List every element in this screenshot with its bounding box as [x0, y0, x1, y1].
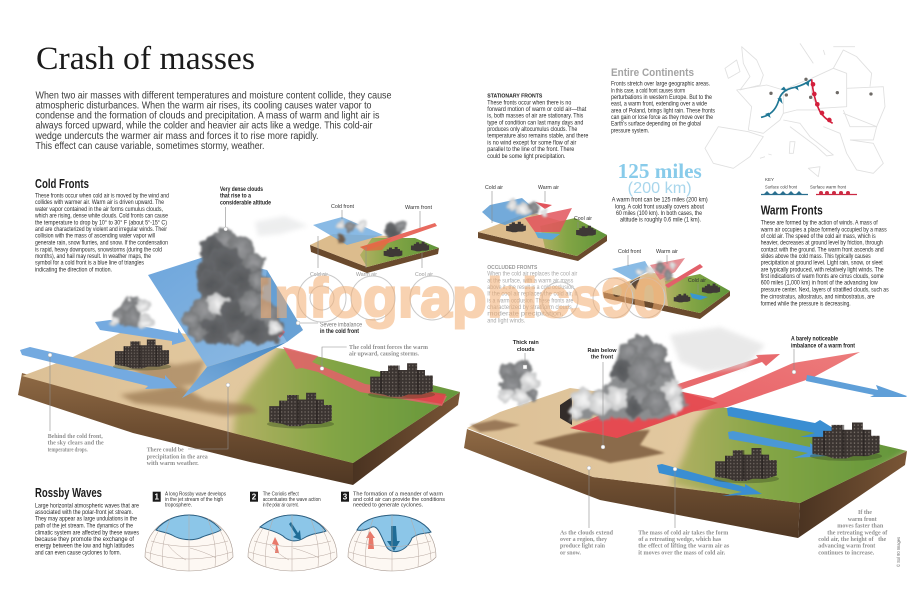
mini diagram: occluded front: Cold air [688, 278, 706, 284]
label: very dense clouds: considerable altitude [220, 200, 272, 206]
globe 3 [348, 515, 436, 571]
panel: occluded fronts [487, 265, 578, 325]
intro text: This effect can cause variable, sometimes stormy, weather. [36, 140, 264, 152]
panel: warm fronts text: These are formed by the action of winds. A mass of [761, 221, 878, 227]
label: mass of cold air: it moves over the mass of cold air. [638, 550, 726, 556]
label: mass of cold air [638, 467, 730, 556]
label: warm air upward: The cold front forces the warm [349, 345, 428, 351]
label: precipitation: with warm weather. [147, 461, 199, 467]
label: warm front faster: continues to increase. [818, 550, 875, 556]
panel: cold fronts text: collision with the mass of ascending water vapor will [35, 234, 155, 240]
watermark: Infographics90 [258, 266, 665, 329]
panel: stationary fronts: temperature also remains stable, and there [487, 134, 589, 140]
map key: Surface cold front [765, 184, 798, 190]
panel: occluded fronts: OCCLUDED FRONTS [487, 265, 538, 271]
panel: cold fronts text: These fronts occur when cold air is moved by the wind and [35, 193, 169, 199]
label: precipitation [147, 383, 230, 467]
label: warm air upward [320, 345, 428, 370]
label: warm front faster: warm front [848, 517, 877, 523]
panel: entire continents [611, 67, 715, 135]
label: barely noticeable imbalance [791, 337, 855, 374]
mini diagram: stationary front: Cold air [485, 185, 503, 191]
label: clouds extend [560, 466, 614, 556]
label: severe imbalance: in the cold front [320, 329, 359, 335]
intro text: condense and the formation of clouds and precipitation. A mass of warm and light air is [36, 110, 380, 122]
panel: rossby waves text: Rossby Waves [35, 486, 102, 500]
label: thick rain clouds [513, 340, 539, 369]
label: mass of cold air: of a retreating wedge, which has [638, 537, 722, 543]
label: very dense clouds [220, 187, 272, 231]
mini diagram: cold and warm front: Warm air [356, 272, 377, 278]
step 1 [153, 492, 226, 508]
step 3: 3 [343, 492, 348, 502]
blue warm air arrows [657, 375, 907, 496]
warm air wedge [570, 352, 860, 438]
panel: warm fronts text: slides above the cold mass. This typically causes [761, 254, 871, 260]
intro text [35, 90, 392, 152]
mini diagram: occluded front: Warm air [656, 249, 678, 255]
label: warm front faster: the retreating wedge of [827, 530, 888, 536]
city [113, 340, 171, 370]
step 3: The formation of a meander of warm [353, 492, 443, 498]
label: warm front faster: advancing warm front [818, 544, 875, 550]
label: rain below the front: Rain below [587, 348, 617, 354]
callout: 125 miles: 60 miles (100 km). In both cases, the [616, 211, 703, 217]
dense cloud [182, 216, 308, 346]
step 3 [341, 492, 446, 508]
panel: stationary fronts: These fronts occur when there is no [487, 100, 572, 106]
panel: cold fronts text: and are characterized by violent and irregular winds. Their [35, 227, 167, 233]
label: warm air upward: air upward, causing storms. [349, 352, 419, 358]
warm air arrows [283, 347, 447, 406]
small cloud [110, 296, 153, 329]
panel: entire continents: pressure system. [611, 129, 649, 135]
panel: warm fronts text [760, 204, 889, 307]
step 1: A long Rossby wave develops [165, 492, 226, 498]
panel: warm fronts text: precipitation at ground level. Light rain, snow, or sleet [761, 261, 883, 267]
panel: stationary fronts: forward motion of warm or cold air—that [487, 107, 587, 113]
panel: warm fronts text: contact with the ground. The warm front ascends and [761, 247, 884, 253]
step 1: in the jet stream of the high [165, 497, 223, 503]
intro text: atmospheric disturbances. When the warm air rises, its cooling causes water vapor to [36, 100, 372, 112]
map key [761, 177, 857, 195]
panel: entire continents: Fronts stretch over large geographic areas. [611, 82, 710, 88]
panel: rossby waves text: climatic system are affected by these waves [35, 530, 139, 536]
panel: stationary fronts: produces only altocumulus clouds. The [487, 127, 578, 133]
panel: cold fronts text: water vapor contained in the air forms cumulus clouds, [34, 207, 163, 213]
label: clouds extend: produce light rain [560, 544, 606, 550]
cities [560, 397, 882, 483]
label: behind the cold front: temperature drops. [48, 447, 88, 453]
title: Crash of masses [36, 41, 255, 77]
panel: warm fronts text: first indications of warm fronts are cirrus clouds, some [761, 274, 884, 280]
panel: stationary fronts: type of condition can last many days and [487, 120, 583, 126]
callout: 125 miles: (200 km) [628, 180, 692, 197]
callout: 125 miles: altitude is roughly 0.6 mile (1 km). [620, 218, 701, 224]
label: mass of cold air: The mass of cold air takes the form [638, 530, 728, 536]
panel: stationary fronts: is no wind except for some flow of air [487, 140, 576, 146]
label: rain below the front: the front [591, 355, 613, 361]
step 2: The Coriolis effect [263, 492, 299, 498]
label: behind the cold front [48, 353, 104, 453]
label: behind the cold front: the sky clears and the [48, 441, 104, 447]
label: precipitation: There could be [147, 447, 184, 453]
step 2: 2 [252, 492, 257, 502]
label: very dense clouds: that rise to a [220, 194, 252, 200]
label: warm front faster: moves faster than [837, 524, 884, 530]
callout: 125 miles: long. A cold front usually covers about [615, 204, 704, 210]
label: mass of cold air: the effect of lifting the warm air as [638, 544, 730, 550]
panel: stationary fronts [487, 93, 589, 160]
panel: cold fronts text: symbol for a cold front is a blue line of triangles [35, 261, 144, 267]
diagram: warm front block [464, 327, 920, 538]
mini diagram: occluded front [603, 249, 730, 319]
blue cold air arrows [20, 320, 186, 389]
globe 1 [145, 515, 233, 571]
panel: stationary fronts: STATIONARY FRONTS [487, 93, 543, 99]
label: rain below the front [587, 348, 617, 449]
mini diagram: cold and warm front: Cold front [331, 204, 354, 210]
step 3: needed to generate cyclones. [353, 502, 423, 508]
terrain block [464, 388, 920, 538]
panel: entire continents: east, a warm front, extending over a wide [611, 102, 708, 108]
thick rain cloud [498, 360, 539, 405]
label: severe imbalance: Severe imbalance [320, 322, 363, 328]
cold air wedge [148, 256, 303, 398]
intro text: always forced upward, while the colder and heavier air acts like a wedge. This cold-air [36, 120, 373, 132]
panel: cold fronts text: which are rising, dense white clouds. Cold fronts can cause [34, 214, 169, 220]
diagram: cold front block [18, 216, 480, 485]
intro text: When two air masses with different temperatures and moisture content collide, they cause [36, 90, 392, 102]
label: very dense clouds: Very dense clouds [220, 187, 264, 193]
label: warm front faster [818, 510, 888, 556]
step 1: 1 [154, 492, 159, 502]
panel: stationary fronts: could be some light precipitation. [487, 154, 566, 160]
intro text: wedge undercuts the warmer air mass and forces it to rise more rapidly. [35, 130, 319, 142]
cities [267, 363, 435, 428]
panel: rossby waves text: path of the jet stream. The dynamics of the [35, 523, 134, 529]
label: clouds extend: over a region, they [560, 537, 607, 543]
panel: cold fronts text: Cold Fronts [35, 177, 89, 191]
label: thick rain clouds: clouds [517, 347, 535, 353]
panel: rossby waves text: and can even cause cyclones to form. [35, 550, 121, 556]
panel: warm fronts text: are typically produced, with relatively light winds. The [761, 267, 884, 273]
step 2: accentuates the wave action [263, 497, 321, 503]
panel: cold fronts text: the temperature to drop by 10° to 30° F (about 5°-15° C) [35, 220, 167, 226]
mini diagram: cold and warm front [310, 204, 439, 278]
panel: rossby waves text: energy between the low and high latitudes [35, 544, 134, 550]
step 2: in the polar air current. [263, 502, 299, 508]
panel: entire continents: Entire Continents [611, 67, 694, 79]
panel: cold fronts text: is rapid, heavy downpours, snowstorms (during the cold [35, 247, 162, 253]
label: clouds extend: As the clouds extend [560, 530, 614, 536]
label: severe imbalance [296, 321, 363, 335]
mini diagram: stationary front: Warm air [538, 185, 559, 191]
map: europe fronts [705, 43, 885, 195]
map key: Surface warm front [810, 184, 847, 190]
panel: cold fronts text: generate rain, snow flurries, and snow. If the condensation [35, 240, 168, 246]
mini diagram: cold and warm front: Warm front [405, 205, 432, 211]
step 1: troposphere. [165, 502, 192, 508]
callout: 125 miles [612, 159, 708, 224]
panel: rossby waves text: They may appear as large undulations in the [35, 517, 138, 523]
mini diagram: stationary front [478, 185, 607, 261]
label: warm front faster: If the [858, 510, 872, 516]
panel: warm fronts text: 600 miles (1,000 km) in front of the advancing low [761, 281, 878, 287]
panel: occluded fronts: is a warm occlusion. These fronts are [487, 298, 574, 304]
step 2 [250, 492, 321, 508]
panel: entire continents: area of Poland, brings light rain. These fronts [611, 108, 715, 114]
panel: rossby waves text: because they promote the exchange of [35, 537, 134, 543]
panel: warm fronts text: of cold air. The speed of the cold air mass, which is [761, 234, 876, 240]
label: warm front faster: cold air, the height of the [818, 537, 887, 543]
panel: occluded fronts: If the cool air replaces the cold air, it [487, 292, 578, 298]
panel: warm fronts text: pressure center. Next, layers of stratified clouds, such as [761, 287, 889, 293]
label: thick rain clouds: Thick rain [513, 340, 539, 346]
panel: rossby waves text: associated with the polar-front jet stream. [35, 510, 133, 516]
panel: entire continents: Earth's surface depending on the global [611, 122, 701, 128]
panel: warm fronts text: warm air occupies a place formerly occupied by a mass [760, 227, 887, 233]
panel: cold fronts text: indicating the direction of motion. [35, 267, 112, 273]
panel: cold fronts text: months), and hail may result. In weather maps, the [35, 254, 152, 260]
panel: warm fronts text: Warm Fronts [761, 204, 823, 218]
panel: occluded fronts: and light winds. [487, 319, 526, 325]
label: barely noticeable imbalance: A barely noticeable [791, 337, 839, 343]
panel: occluded fronts: at the surface, with a warm air mass [487, 278, 573, 284]
credit: © Sol 90 Images [895, 536, 901, 567]
map key: KEY [765, 177, 774, 182]
panel: cold fronts text [34, 177, 169, 273]
label: behind the cold front: Behind the cold front, [48, 434, 103, 440]
panel: warm fronts text: the cirrostratus, altostratus, and nimbostratus, are [761, 294, 875, 300]
panel: warm fronts text: formed while the pressure is decreasing. [761, 301, 851, 307]
panel: occluded fronts: When the cold air replaces the cool air [487, 272, 577, 278]
panel: entire continents: perturbations in western Europe. But to the [611, 95, 713, 101]
front clouds [568, 327, 765, 420]
panel: entire continents: In this case, a cold front causes storm [611, 88, 685, 94]
panel: stationary fronts: is, both masses of air are stationary. This [487, 114, 583, 120]
label: barely noticeable imbalance: imbalance of a warm front [791, 343, 855, 349]
mini diagram: cold and warm front: Cool air [415, 272, 433, 278]
callout: 125 miles: 125 miles [618, 159, 702, 183]
panel: warm fronts text: heavier, decreases at ground level by friction, through [761, 241, 883, 247]
panel: cold fronts text: collides with warmer air. Warm air is driven upward. The [35, 200, 165, 206]
label: clouds extend: or snow. [560, 550, 581, 556]
mini diagram: cold and warm front: Cold air [310, 272, 328, 278]
panel: rossby waves text: Large horizontal atmospheric waves that are [35, 503, 140, 509]
terrain block [18, 333, 480, 485]
mini diagram: stationary front: Cool air [574, 216, 592, 222]
panel: stationary fronts: parallel to the line of the front. There [487, 147, 575, 153]
panel: occluded fronts: characterized by stratiform clouds, [487, 305, 574, 311]
mini diagram: occluded front: Cold front [618, 249, 641, 255]
step 3: and cold air can provide the conditions [353, 497, 446, 503]
panel: occluded fronts: moderate precipitation, [487, 312, 564, 318]
panel: entire continents: can gain or lose force as they move over the [611, 115, 714, 121]
panel: occluded fronts: above it, the result is a cold occlusion. [487, 285, 576, 291]
label: precipitation: precipitation in the area [147, 454, 208, 460]
callout: 125 miles: A warm front can be 125 miles (200 km) [612, 198, 708, 204]
globe 2 [248, 515, 337, 571]
panel: rossby waves text [35, 486, 140, 556]
